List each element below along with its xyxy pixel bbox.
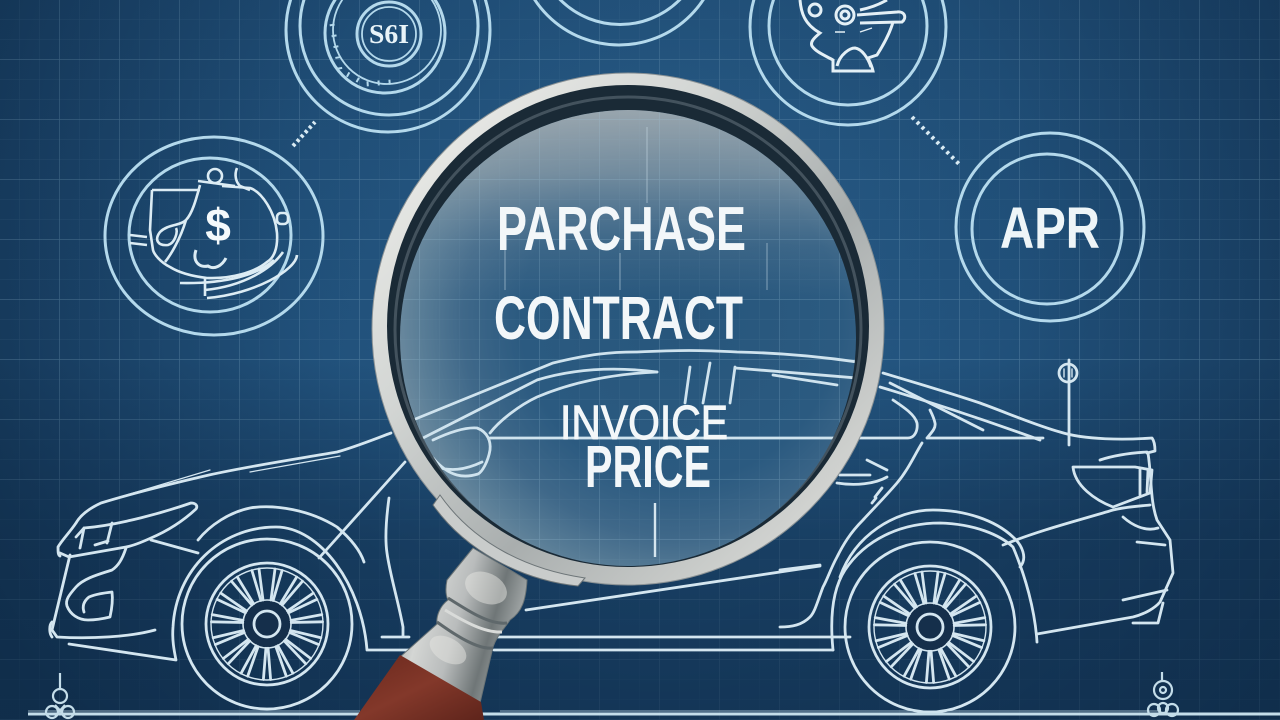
handle wood [354, 655, 484, 720]
icon: top-right piggy bank circle [750, 0, 946, 125]
icon: APR circle [956, 133, 1144, 321]
car front [50, 433, 409, 660]
magnified car roof [414, 349, 855, 478]
text: PARCHASE: PARCHASE [497, 195, 746, 264]
text: CONTRACT: CONTRACT [494, 284, 743, 352]
inner dark band [387, 85, 869, 567]
text: APR: APR [1000, 196, 1100, 261]
car roof and rear [780, 373, 1173, 650]
icon: top-center partial circle [518, 0, 720, 45]
annotation: left dotted connector [293, 122, 315, 146]
annotation: right dotted connector [912, 117, 960, 165]
faint guide lines [505, 127, 767, 290]
icon: money bag circle: $ [205, 199, 231, 251]
text: PRICE: PRICE [585, 434, 711, 500]
icon: money bag circle [105, 137, 323, 335]
car rear wheel [845, 542, 1015, 712]
lens rim [372, 73, 884, 585]
car blueprint outline [50, 360, 1173, 712]
lens glass [400, 110, 856, 566]
guide line bright [654, 503, 656, 557]
handle collar and metal [400, 548, 527, 703]
magnifying glass [354, 73, 884, 720]
rim tab [433, 495, 585, 586]
car front wheel [182, 539, 352, 709]
car middle sill [494, 566, 850, 650]
icon: top-left seal circle: S6I [369, 19, 409, 49]
dimension marker: rear roof [1059, 360, 1077, 445]
marker: front [46, 673, 74, 718]
icon: top-left seal circle [286, 0, 490, 132]
text: INVOICE: INVOICE [560, 397, 728, 450]
lens contents [370, 110, 870, 566]
baseline with markers [28, 672, 1280, 718]
marker: rear [1148, 672, 1178, 716]
